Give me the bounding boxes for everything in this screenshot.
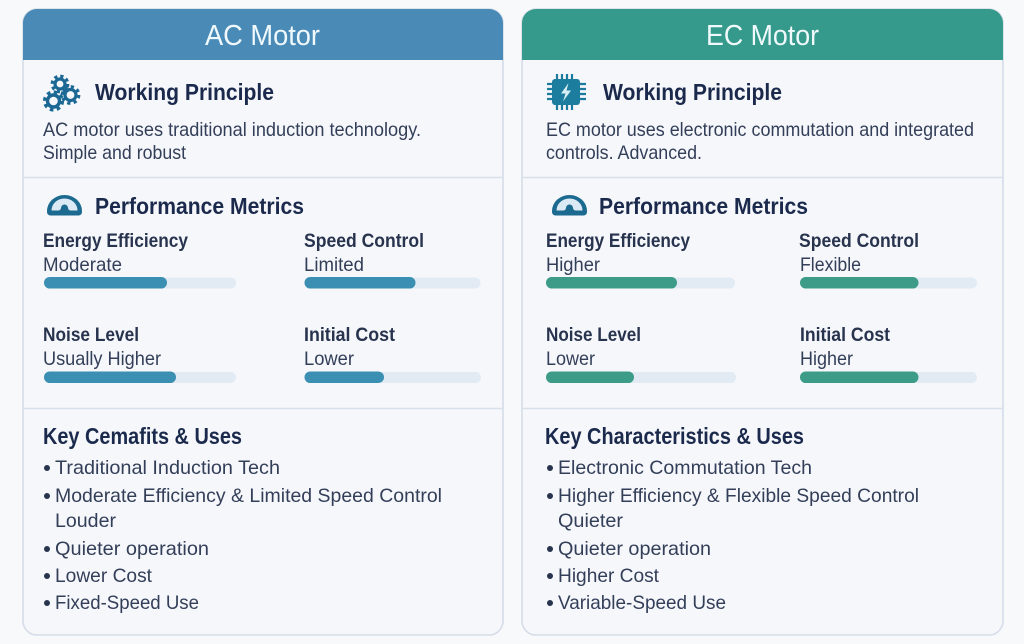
metric: noise level: Noise Level — [43, 325, 139, 346]
bullet list: Quieter operation — [55, 538, 209, 560]
bullet list: Moderate Efficiency & Limited Speed Control — [55, 485, 442, 507]
heading: Working Principle — [95, 79, 274, 105]
metric: energy efficiency — [43, 231, 236, 288]
metric: speed control: Limited — [304, 254, 364, 276]
metric: energy efficiency: Energy Efficiency — [43, 231, 188, 252]
metric: noise level — [43, 325, 236, 383]
panel: EC motor — [522, 9, 1003, 635]
metric: initial cost: Higher — [800, 348, 853, 370]
header: EC Motor: EC Motor — [706, 20, 819, 52]
icon: microchip with lightning bolt — [547, 74, 586, 110]
description: Simple and robust — [43, 142, 187, 164]
description — [43, 119, 421, 164]
metric: noise level — [546, 325, 736, 383]
description: AC motor uses traditional induction technology. — [43, 119, 421, 141]
metric: noise level: Noise Level — [546, 325, 641, 346]
metric: energy efficiency — [546, 231, 735, 288]
metric: initial cost — [800, 325, 977, 383]
panel: AC motor — [23, 9, 503, 635]
bullet list: Higher Cost — [558, 565, 660, 587]
section: EC key characteristics and uses — [545, 423, 919, 614]
section: AC performance metrics — [43, 193, 481, 383]
bullet list: Louder — [55, 510, 117, 532]
bullet list: Fixed-Speed Use — [55, 592, 199, 614]
header: EC Motor — [522, 9, 1003, 60]
icon: gauge — [47, 195, 82, 216]
metric: noise level: Lower — [546, 348, 595, 370]
metric: noise level: Usually Higher — [43, 348, 161, 370]
bullet list: Electronic Commutation Tech — [558, 457, 812, 479]
header: AC Motor — [23, 9, 503, 60]
metric: speed control: Flexible — [800, 254, 861, 276]
bullet list — [547, 457, 919, 614]
description: EC motor uses electronic commutation and integrated — [546, 119, 974, 141]
description: controls. Advanced. — [546, 142, 702, 164]
metric: initial cost: Initial Cost — [304, 325, 396, 346]
icon: gauge — [552, 195, 587, 216]
icon: gears — [44, 76, 79, 110]
bullet list — [44, 457, 442, 614]
metric: speed control: Speed Control — [799, 231, 919, 252]
heading: Key Cemafits & Uses — [43, 423, 242, 449]
description — [546, 119, 974, 164]
heading: Performance Metrics — [599, 193, 808, 219]
section: EC performance metrics — [546, 193, 977, 383]
metric: speed control — [304, 231, 480, 288]
bullet list: Quieter — [558, 510, 624, 532]
heading: Working Principle — [603, 79, 782, 105]
bullet list: Variable-Speed Use — [558, 592, 726, 614]
bullet list: Lower Cost — [55, 565, 153, 587]
section: AC working principle — [43, 76, 421, 164]
heading: Key Characteristics & Uses — [545, 423, 804, 449]
metric: energy efficiency: Higher — [546, 254, 600, 276]
metric: energy efficiency: Energy Efficiency — [546, 231, 690, 252]
metric: initial cost: Initial Cost — [800, 325, 891, 346]
bullet list: Quieter operation — [558, 538, 711, 560]
metric: initial cost: Lower — [304, 348, 354, 370]
metric: initial cost — [304, 325, 481, 383]
header: AC Motor: AC Motor — [205, 20, 320, 52]
metric: speed control — [799, 231, 977, 288]
heading: Performance Metrics — [95, 193, 304, 219]
card background — [522, 9, 1003, 635]
section: AC key benefits and uses — [43, 423, 442, 614]
bullet list: Higher Efficiency & Flexible Speed Control — [558, 485, 919, 507]
metric: speed control: Speed Control — [304, 231, 424, 252]
card background — [23, 9, 503, 635]
metric: energy efficiency: Moderate — [43, 254, 122, 276]
bullet list: Traditional Induction Tech — [55, 457, 280, 479]
section: EC working principle — [546, 74, 974, 164]
